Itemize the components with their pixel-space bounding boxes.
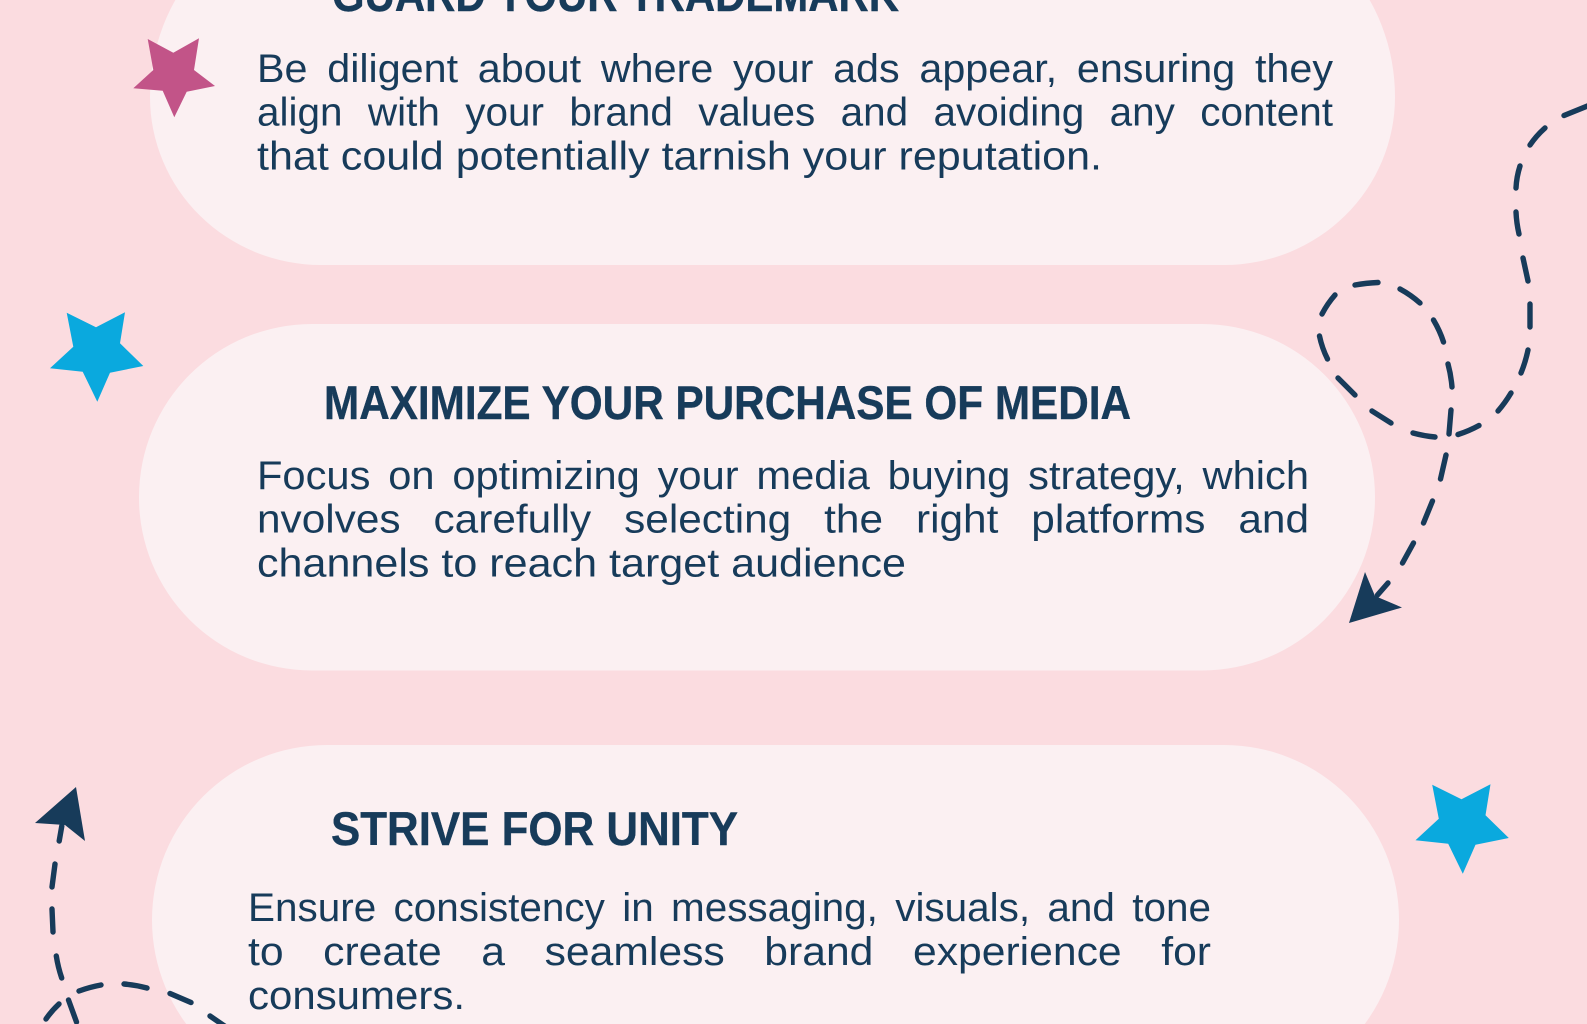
text block: guard your trademark xyxy=(257,47,1333,178)
icon: arrowhead left xyxy=(35,787,85,841)
text block: guard your trademark: Be diligent about where your ads appear, ensuring they xyxy=(257,47,1333,91)
heading: strive for unity: STRIVE FOR UNITY xyxy=(331,802,738,855)
panel: guard your trademark xyxy=(150,0,1395,265)
panel: strive for unity xyxy=(152,745,1399,1024)
icon: arrowhead right xyxy=(1349,572,1402,623)
text block: maximize your purchase of media: Focus on optimizing your media buying strategy, which xyxy=(257,454,1309,498)
icon: blue star right xyxy=(1416,784,1509,874)
heading: maximize your purchase of media: MAXIMIZE YOUR PURCHASE OF MEDIA xyxy=(324,376,1131,429)
text block: maximize your purchase of media: channels to reach target audience xyxy=(257,542,906,586)
text block: guard your trademark: align with your brand values and avoiding any content xyxy=(257,90,1333,134)
text block: guard your trademark: that could potentially tarnish your reputation. xyxy=(257,134,1102,178)
text block: strive for unity: to create a seamless brand experience for xyxy=(248,930,1211,974)
arrow: dashed loop right xyxy=(1320,105,1587,623)
text block: strive for unity: consumers. xyxy=(248,974,465,1018)
text block: strive for unity xyxy=(248,886,1211,1018)
icon: pink star xyxy=(133,38,215,117)
panel: maximize your purchase of media xyxy=(139,324,1375,670)
text block: strive for unity: Ensure consistency in messaging, visuals, and tone xyxy=(248,886,1211,930)
icon: blue star left xyxy=(50,312,143,402)
text block: maximize your purchase of media: nvolves carefully selecting the right platforms and xyxy=(257,498,1309,542)
text block: maximize your purchase of media xyxy=(257,454,1309,586)
arrow: dashed loop left xyxy=(35,787,226,1024)
